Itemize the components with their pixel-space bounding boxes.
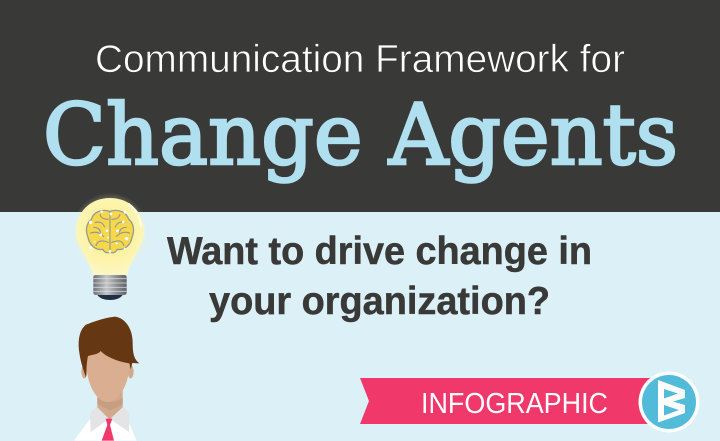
icon: person: [74, 317, 139, 441]
heading: want to drive change: [167, 230, 592, 323]
ribbon: infographic: INFOGRAPHIC: [421, 388, 608, 420]
title line: Communication Framework for: [95, 38, 625, 81]
ribbon: infographic: [360, 378, 652, 424]
icon: light bulb with brain: [71, 193, 149, 300]
heading: want to drive change: your organization?: [209, 280, 550, 323]
title: Change Agents: Change Agents: [43, 86, 678, 184]
heading: want to drive change: Want to drive change in: [167, 230, 592, 273]
header band: [0, 0, 720, 212]
icon: logo badge: [638, 372, 700, 432]
